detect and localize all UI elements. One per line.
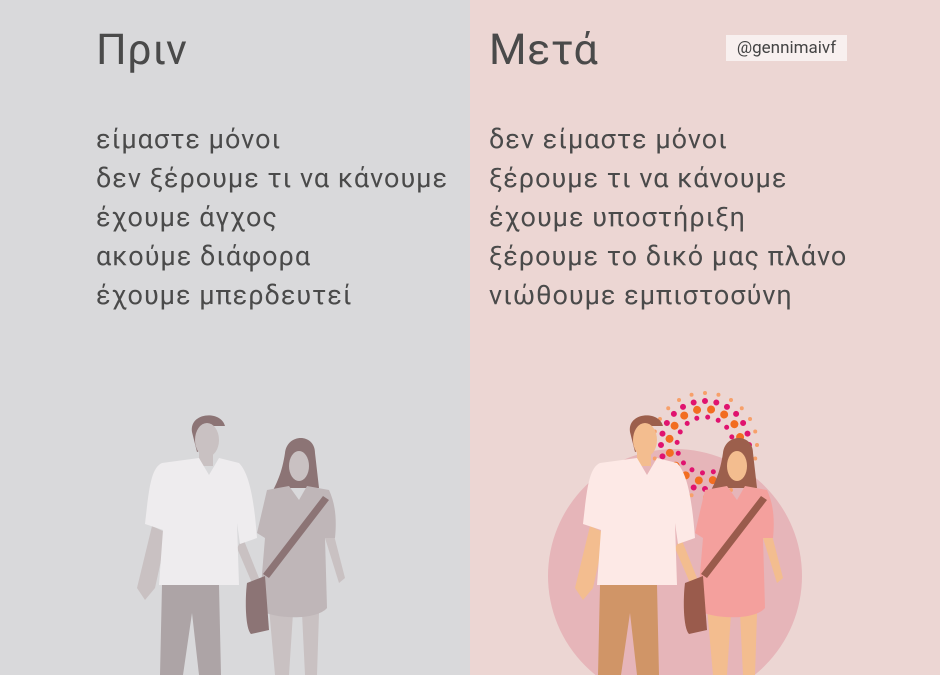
title: before: Πριν <box>96 25 187 75</box>
panel: before <box>0 0 470 675</box>
text: after list: ξέρουμε το δικό μας πλάνο <box>489 240 847 272</box>
couple: before <box>137 415 345 675</box>
tag <box>726 35 847 61</box>
text: before list: ακούμε διάφορα <box>96 240 311 272</box>
circle background <box>548 449 802 675</box>
text: after list: ξέρουμε τι να κάνουμε <box>489 162 787 194</box>
text: before list: είμαστε μόνοι <box>96 123 281 155</box>
text: before list: έχουμε μπερδευτεί <box>96 279 353 311</box>
text: before list: έχουμε άγχος <box>96 201 278 233</box>
title: after: Μετά <box>489 25 598 75</box>
text: before list <box>96 123 448 311</box>
couple: after <box>575 415 783 675</box>
panel: after <box>470 0 940 675</box>
tag: @gennimaivf <box>737 38 836 58</box>
icon: dotted ring <box>653 393 757 497</box>
text: after list: νιώθουμε εμπιστοσύνη <box>489 279 793 311</box>
text: after list <box>489 123 847 311</box>
text: after list: έχουμε υποστήριξη <box>489 201 746 233</box>
text: before list: δεν ξέρουμε τι να κάνουμε <box>96 162 448 194</box>
text: after list: δεν είμαστε μόνοι <box>489 123 728 155</box>
